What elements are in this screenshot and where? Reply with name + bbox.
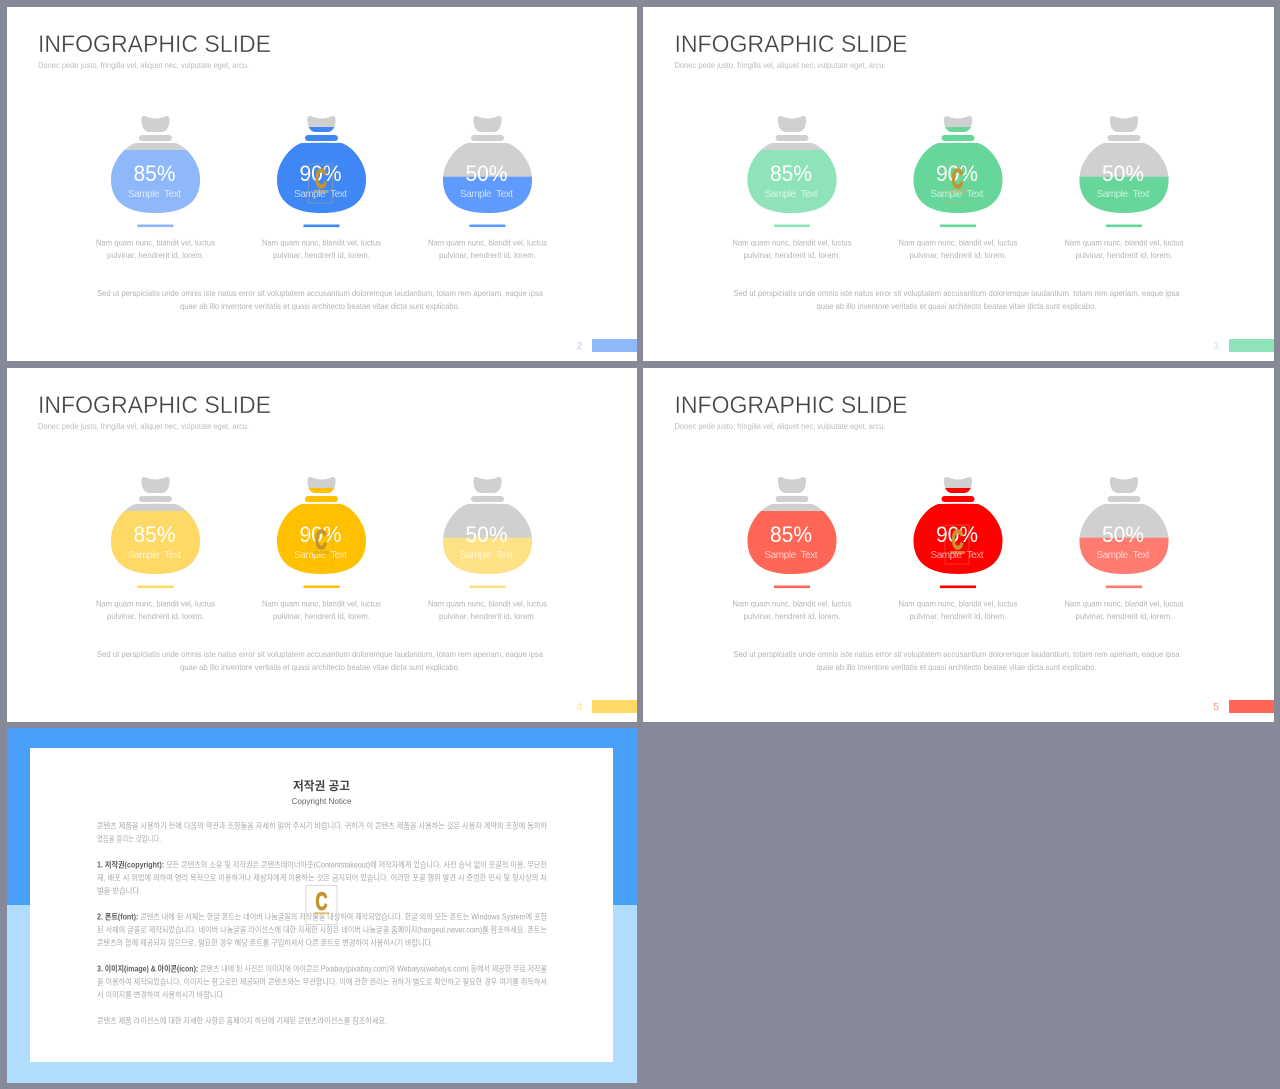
- text: description 2: pulvinar, hendrerit id, lorem.: [273, 250, 370, 260]
- text: description 1: pulvinar, hendrerit id, lorem.: [107, 611, 204, 621]
- title: INFOGRAPHIC SLIDE: [674, 392, 908, 419]
- text: body paragraph: Sed ut perspiciatis unde omnis iste natus error sit voluptatem accusantium doloremque laudantium, totam rem aperiam, eaque ipsa: [734, 649, 1180, 659]
- icon: money bag 90%: C: [952, 163, 964, 194]
- text: section 2 font: 콘텐츠의 함께 제공되지 않으므로, 필요한 경우 해당 폰트를 구입하셔서 다른 폰트로 변경하여 사용하시기 바랍니다.: [97, 938, 433, 948]
- text: description 3: Nam quam nunc, blandit vel, luctus: [428, 598, 547, 608]
- subtitle: Donec pede justo, fringilla vel, aliquet nec, vulputate eget, arcu.: [674, 60, 886, 70]
- icon: money bag 90%: C: [315, 524, 327, 555]
- icon: money bag 90%: [913, 477, 1003, 588]
- icon: money bag 85%: [110, 116, 200, 228]
- title: INFOGRAPHIC SLIDE: [38, 31, 271, 58]
- icon: money bag 50%: 50%: [466, 522, 508, 547]
- text: description 2: [898, 598, 1018, 621]
- icon: money bag 85%: 85%: [770, 522, 812, 547]
- text: description 2: Nam quam nunc, blandit vel, luctus: [898, 238, 1018, 248]
- text: license note: 콘텐츠 제품 라이선스에 대한 자세한 사항은 홈페이지 하단에 기재된 콘텐츠라이선스를 참조하세요.: [97, 1016, 387, 1026]
- text: description 2: pulvinar, hendrerit id, lorem.: [273, 611, 370, 621]
- subheading: Copyright Notice: [292, 796, 352, 806]
- text: description 2: Nam quam nunc, blandit vel, luctus: [898, 598, 1018, 608]
- icon: money bag 90%: C: [952, 524, 964, 555]
- text: body paragraph: [97, 649, 543, 672]
- text: intro: 콘텐츠 제품을 사용하기 전에 다음의 약관과 조항들을 자세히 읽어 주시기 바랍니다. 귀하가 이 콘텐츠 제품을 사용하는 것은 사용자 계약의 조항에 동의하: [97, 820, 548, 830]
- text: body paragraph: quae ab illo inventore veritatis et quasi architecto beatae vitae dicta sunt explicabo.: [180, 662, 460, 672]
- text: description 1: pulvinar, hendrerit id, lorem.: [107, 250, 204, 260]
- page number: 5: [1213, 702, 1219, 713]
- text: body paragraph: quae ab illo inventore veritatis et quasi architecto beatae vitae dicta sunt explicabo.: [180, 301, 460, 311]
- text: description 1: pulvinar, hendrerit id, lorem.: [744, 250, 840, 260]
- text: description 2: pulvinar, hendrerit id, lorem.: [910, 250, 1006, 260]
- text: description 3: [428, 598, 547, 621]
- text: description 1: [732, 238, 852, 260]
- text: description 3: [1064, 598, 1184, 621]
- text: body paragraph: quae ab illo inventore veritatis et quasi architecto beatae vitae dicta sunt explicabo.: [816, 662, 1096, 672]
- page number: 3: [1213, 341, 1219, 352]
- text: description 2: [262, 598, 381, 621]
- icon: money bag 85%: Sample Text: [128, 550, 181, 561]
- icon: money bag 90%: 90%: [300, 161, 342, 186]
- panel: blue slide: [7, 7, 637, 361]
- icon: money bag 90%: 90%: [936, 522, 978, 547]
- text: section 1 copyright: 재, 배포 시 위법에 의하여 영리 목적으로 이용하거나 제삼자에게 이용하는 것은 금지되어 있습니다. 이러한 포괄 행위 발견 시 준엄한 민사 및 형사상의 처: [97, 872, 547, 882]
- text: body paragraph: Sed ut perspiciatis unde omnis iste natus error sit voluptatem accusantium doloremque laudantium, totam rem aperiam, eaque ipsa: [97, 288, 543, 298]
- text: section 2 font: [97, 912, 548, 948]
- text: description 1: Nam quam nunc, blandit vel, luctus: [96, 238, 215, 248]
- text: section 3 image and icon: [97, 964, 547, 1000]
- text: description 3: Nam quam nunc, blandit vel, luctus: [1064, 598, 1184, 608]
- icon: money bag 90%: C: [315, 163, 327, 194]
- subtitle: Donec pede justo, fringilla vel, aliquet nec, vulputate eget, arcu.: [38, 60, 249, 70]
- icon: money bag 50%: Sample Text: [1096, 550, 1150, 561]
- text: description 3: [428, 238, 547, 260]
- text: description 1: [732, 598, 852, 621]
- text: description 2: pulvinar, hendrerit id, lorem.: [910, 611, 1006, 621]
- panel: yellow slide: [7, 368, 637, 722]
- page number: 2: [577, 341, 583, 352]
- icon: money bag 90%: [277, 116, 366, 227]
- text: description 2: Nam quam nunc, blandit vel, luctus: [262, 238, 381, 248]
- text: description 1: pulvinar, hendrerit id, lorem.: [744, 611, 840, 621]
- text: body paragraph: Sed ut perspiciatis unde omnis iste natus error sit voluptatem accusantium doloremque laudantium, totam rem aperiam, eaque ipsa: [734, 288, 1180, 298]
- text: description 3: [1064, 238, 1184, 260]
- icon: money bag 85%: Sample Text: [764, 550, 818, 561]
- text: description 3: Nam quam nunc, blandit vel, luctus: [1064, 238, 1184, 248]
- page number: [577, 339, 637, 352]
- text: description 2: Nam quam nunc, blandit vel, luctus: [262, 598, 381, 608]
- icon: money bag 50%: [442, 116, 532, 228]
- text: section 1 copyright: 1. 저작권(copyright): 모든 콘텐츠의 소유 및 저작권은 콘텐츠테이너아웃(Contentstakeout)에 저작자에게 있습니다. 사전 승낙 없이 포괄적 이용, 무단전: [97, 860, 547, 870]
- icon: money bag 85%: [747, 477, 836, 588]
- title: INFOGRAPHIC SLIDE: [38, 392, 271, 419]
- subtitle: Donec pede justo, fringilla vel, aliquet nec, vulputate eget, arcu.: [38, 421, 249, 431]
- text: description 1: Nam quam nunc, blandit vel, luctus: [732, 598, 852, 608]
- text: description 2: [898, 238, 1018, 260]
- text: section 2 font: 2. 폰트(font): 콘텐츠 내에 된 서체는 한글 폰트는 네이버 나눔글꼴의 저작물을 대상하여 제작되었습니다. 한글 외의 모든 폰트는 Windows System에 포함: [97, 912, 548, 922]
- panel: copyright notice: [7, 728, 637, 1083]
- text: intro: 였음을 알리는 것입니다.: [97, 834, 161, 844]
- icon: money bag 50%: [442, 477, 532, 588]
- text: intro: [97, 820, 548, 844]
- text: section 2 font: 된 서체의 글꼴로 제작되었습니다. 네이버 나눔글꼴 라이선스에 대한 자세한 사항은 네이버 나눔글꼴 홈페이지(hangeul.naver.com)를 참조하세요. 폰트는: [97, 924, 547, 934]
- icon: watermark: [306, 886, 337, 924]
- text: section 3 image and icon: 서 이미지를 변경하여 사용하시기 바랍니다.: [97, 990, 225, 1000]
- icon: money bag 50%: Sample Text: [460, 189, 513, 200]
- panel: green slide: [643, 7, 1274, 361]
- text: description 2: [262, 238, 381, 260]
- icon: money bag 90%: Sample Text: [294, 189, 347, 200]
- icon: money bag 50%: Sample Text: [460, 550, 513, 561]
- text: section 1 copyright: 벌을 받습니다.: [97, 886, 141, 896]
- page number: [1213, 339, 1274, 352]
- text: section 3 image and icon: 을 이용하여 제작되었습니다. 이미지는 참고로만 제공되며 콘텐츠와는 무관합니다. 이에 관한 권리는 귀하가 별도로 확인하고 필요한 경우 여기를 취득하셔: [97, 976, 547, 986]
- title: INFOGRAPHIC SLIDE: [674, 31, 908, 58]
- page number: [577, 700, 637, 713]
- page number: 4: [577, 702, 583, 713]
- text: description 1: Nam quam nunc, blandit vel, luctus: [732, 238, 852, 248]
- icon: money bag 90%: [277, 477, 366, 588]
- icon: money bag 85%: [747, 116, 836, 228]
- icon: money bag 90%: [913, 116, 1003, 227]
- icon: money bag 90%: Sample Text: [930, 550, 984, 561]
- icon: money bag 85%: [110, 477, 200, 588]
- icon: money bag 50%: [1079, 477, 1168, 588]
- text: description 1: [96, 238, 215, 260]
- text: description 1: Nam quam nunc, blandit vel, luctus: [96, 598, 215, 608]
- text: description 3: pulvinar, hendrerit id, lorem.: [1076, 250, 1172, 260]
- icon: money bag 85%: Sample Text: [128, 189, 181, 200]
- panel: red slide: [643, 368, 1274, 722]
- page number: [1213, 700, 1274, 713]
- text: body paragraph: [97, 288, 543, 311]
- icon: money bag 85%: Sample Text: [764, 189, 818, 200]
- text: description 3: pulvinar, hendrerit id, lorem.: [439, 611, 536, 621]
- icon: money bag 90%: Sample Text: [930, 189, 984, 200]
- text: body paragraph: Sed ut perspiciatis unde omnis iste natus error sit voluptatem accusantium doloremque laudantium, totam rem aperiam, eaque ipsa: [97, 649, 543, 659]
- text: body paragraph: [734, 649, 1180, 672]
- icon: money bag 50%: 50%: [1102, 522, 1144, 547]
- icon: money bag 90%: Sample Text: [294, 550, 347, 561]
- icon: money bag 50%: 50%: [466, 161, 508, 186]
- icon: money bag 85%: 85%: [770, 161, 812, 186]
- text: section 3 image and icon: 3. 이미지(image) & 아이콘(icon): 콘텐츠 내에 된 사진은 이미지와 아이콘은 Pixabay(pixabay.com)와 Webalys(webalys.com) 등에서 제공한 무료 저작물: [97, 964, 547, 974]
- text: description 3: pulvinar, hendrerit id, lorem.: [439, 250, 536, 260]
- text: description 3: Nam quam nunc, blandit vel, luctus: [428, 238, 547, 248]
- heading: 저작권 공고: [293, 778, 350, 793]
- text: body paragraph: quae ab illo inventore veritatis et quasi architecto beatae vitae dicta sunt explicabo.: [816, 301, 1096, 311]
- icon: money bag 90%: 90%: [936, 161, 978, 186]
- text: body paragraph: [734, 288, 1180, 311]
- icon: watermark: C: [316, 888, 328, 916]
- subtitle: Donec pede justo, fringilla vel, aliquet nec, vulputate eget, arcu.: [674, 421, 886, 431]
- icon: money bag 85%: 85%: [134, 161, 176, 186]
- icon: money bag 85%: 85%: [134, 522, 176, 547]
- text: section 1 copyright: [97, 860, 547, 896]
- text: description 3: pulvinar, hendrerit id, lorem.: [1076, 611, 1172, 621]
- icon: money bag 50%: Sample Text: [1096, 189, 1150, 200]
- icon: money bag 50%: [1079, 116, 1168, 228]
- icon: money bag 90%: 90%: [300, 522, 342, 547]
- icon: money bag 50%: 50%: [1102, 161, 1144, 186]
- text: description 1: [96, 598, 215, 621]
